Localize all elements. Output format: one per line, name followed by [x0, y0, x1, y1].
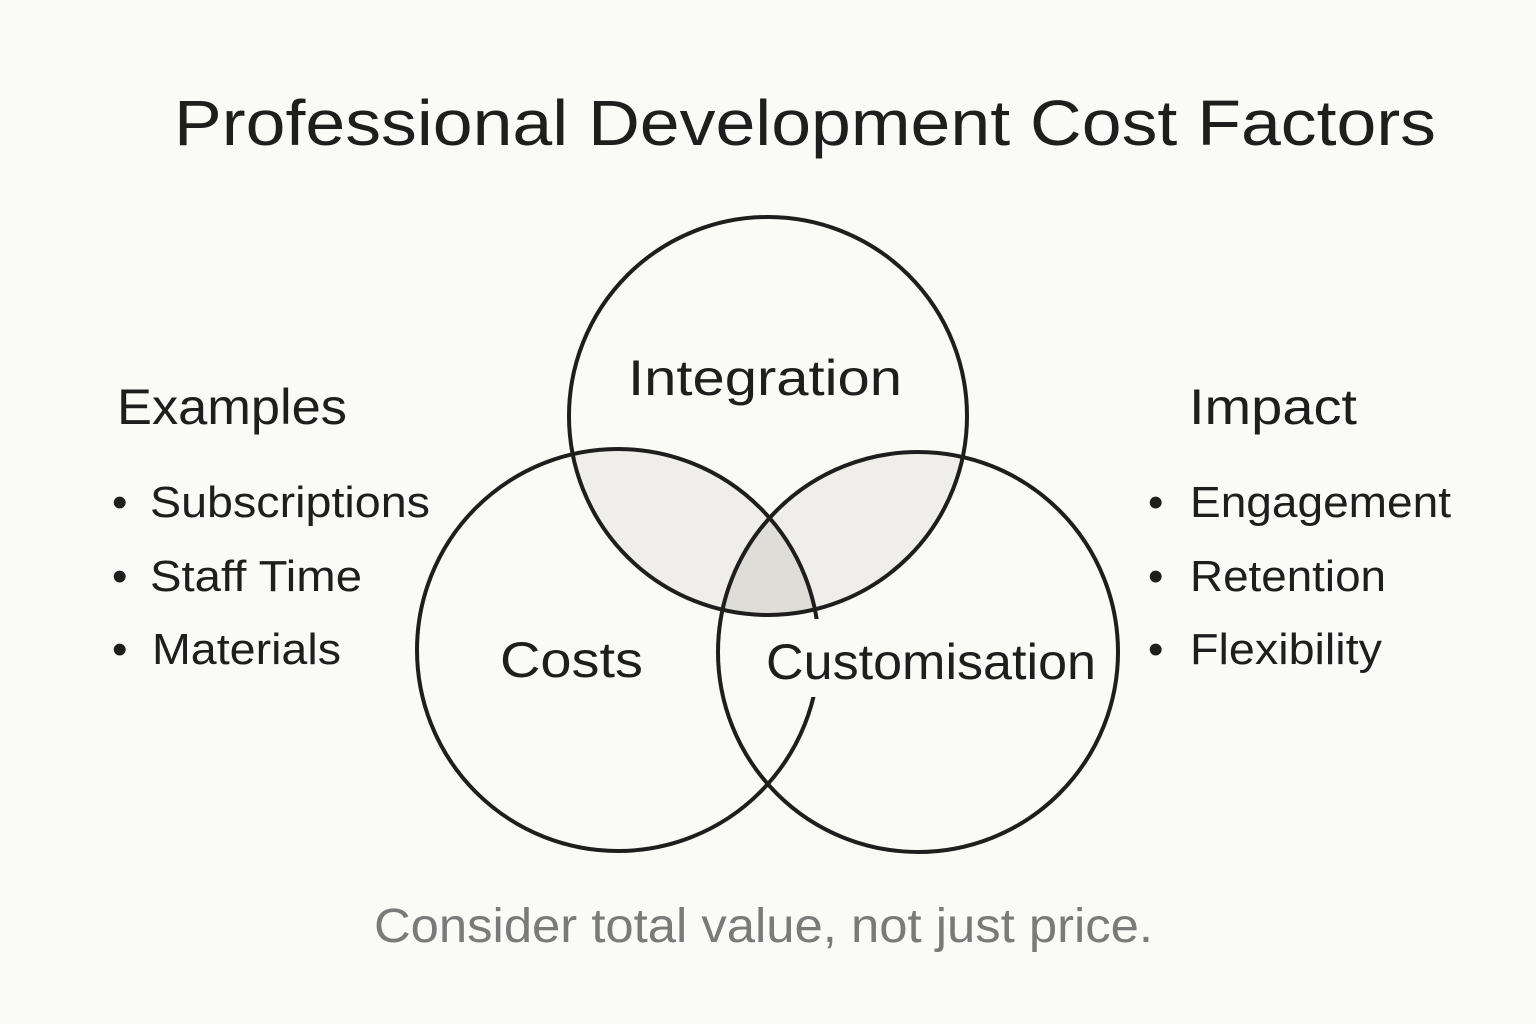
- list: examples: •: [112, 552, 127, 601]
- venn diagram: [417, 217, 1118, 852]
- list: impact: [1148, 478, 1451, 674]
- shading: top-left overlap: [575, 451, 766, 607]
- circle: costs: [417, 449, 819, 851]
- list: examples: Subscriptions: [150, 478, 430, 527]
- list: impact: Retention: [1190, 552, 1386, 601]
- list: impact: •: [1148, 552, 1163, 601]
- list: impact: Engagement: [1190, 478, 1451, 527]
- shading: triple overlap: [725, 522, 812, 613]
- label: customisation: Customisation: [766, 634, 1096, 690]
- circle: integration: [569, 217, 967, 615]
- heading: examples: Examples: [117, 379, 347, 435]
- label: costs: Costs: [500, 632, 643, 688]
- list: impact: •: [1148, 478, 1163, 527]
- list: examples: Materials: [152, 625, 341, 674]
- shading: top-right overlap: [772, 454, 960, 606]
- list: impact: Flexibility: [1190, 625, 1382, 674]
- panel: examples: [112, 379, 430, 674]
- panel: impact: [1148, 379, 1451, 674]
- list: examples: •: [112, 625, 127, 674]
- title: Professional Development Cost Factors: [174, 87, 1436, 159]
- list: examples: •: [112, 478, 127, 527]
- heading: impact: Impact: [1189, 379, 1357, 435]
- list: examples: [112, 478, 430, 674]
- circle: customisation: [718, 452, 1118, 852]
- list: examples: Staff Time: [150, 552, 362, 601]
- footer note: Consider total value, not just price.: [374, 900, 1153, 953]
- list: impact: •: [1148, 625, 1163, 674]
- label: integration: Integration: [628, 350, 902, 406]
